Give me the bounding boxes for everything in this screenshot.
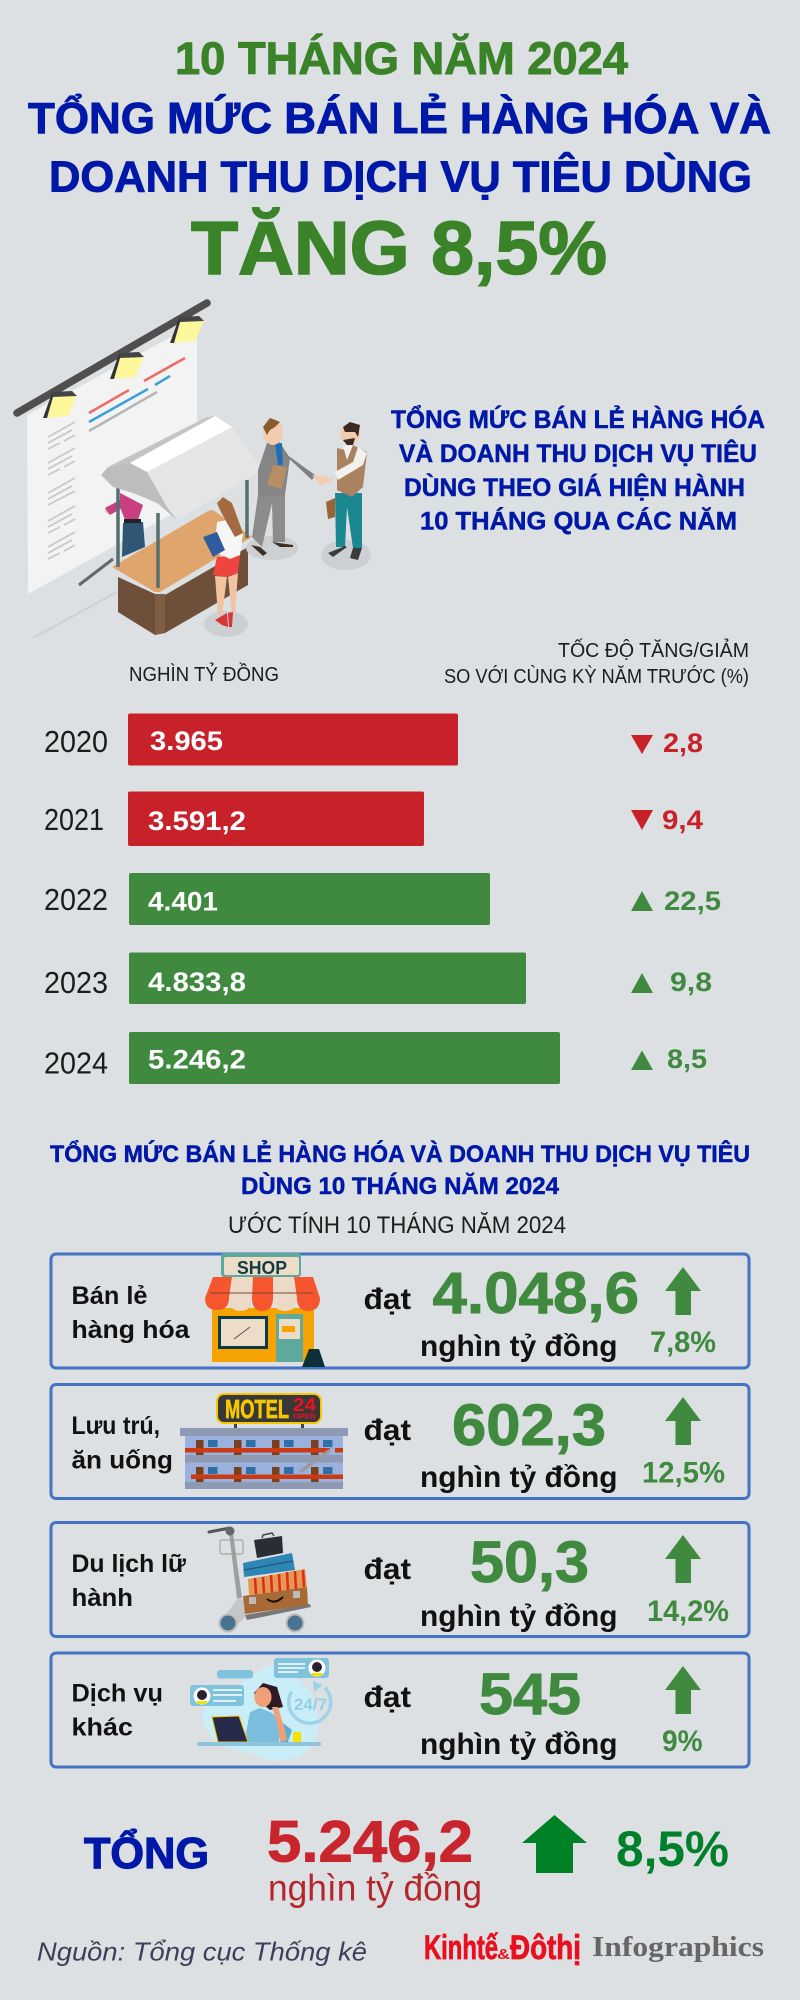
arrow up — [665, 1535, 701, 1583]
panel: other services — [51, 1653, 749, 1767]
icon: shop — [205, 1253, 325, 1367]
bar 2021: 2021 — [44, 802, 104, 837]
section subheading: ƯỚC TÍNH 10 THÁNG NĂM 2024 — [228, 1212, 566, 1239]
text: dat: đạt — [364, 1283, 411, 1316]
icon: motel: 24 — [293, 1395, 316, 1415]
icon: motel: OPEN — [293, 1412, 316, 1420]
bar 2024: 2024 — [44, 1046, 108, 1080]
bar 2021: 3.591,2 — [148, 806, 246, 836]
title: TỔNG MỨC BÁN LẺ HÀNG HÓA VÀ — [28, 92, 771, 143]
label: retail: hàng hóa — [72, 1316, 191, 1344]
label: accommodation — [72, 1412, 173, 1474]
axis label: growth rate — [444, 638, 749, 688]
growth: 14,2% — [647, 1595, 729, 1628]
icon: luggage trolley — [209, 1526, 311, 1632]
title: DOANH THU DỊCH VỤ TIÊU DÙNG — [49, 152, 752, 202]
subheading: chart title: DÙNG THEO GIÁ HIỆN HÀNH — [404, 472, 745, 502]
label: travel: Du lịch lữ — [72, 1550, 187, 1578]
bar 2022 — [44, 873, 721, 925]
value: 4.048,6 — [432, 1261, 639, 1326]
total label: TỔNG — [84, 1827, 209, 1878]
bar 2020: 2020 — [44, 724, 108, 759]
label: other services: Dịch vụ — [72, 1680, 163, 1708]
axis label: growth rate: SO VỚI CÙNG KỲ NĂM TRƯỚC (%) — [444, 665, 749, 688]
unit: nghìn tỷ đồng — [420, 1461, 618, 1494]
total value — [267, 1810, 482, 1908]
total value: nghìn tỷ đồng — [268, 1868, 482, 1908]
bar 2023: 4.833,8 — [148, 967, 246, 997]
total growth: 8,5% — [616, 1821, 729, 1877]
label: retail — [72, 1282, 191, 1344]
bar 2021 — [44, 792, 703, 846]
label: accommodation: Lưu trú, — [72, 1412, 160, 1440]
arrow up — [665, 1267, 701, 1315]
icon: customer support — [190, 1658, 336, 1760]
growth: 7,8% — [650, 1326, 716, 1359]
unit: nghìn tỷ đồng — [420, 1330, 618, 1363]
section heading — [50, 1139, 750, 1200]
axis label: unit: NGHÌN TỶ ĐỒNG — [129, 662, 279, 686]
bar 2024 — [44, 1032, 707, 1084]
bar 2023: 9,8 — [670, 967, 712, 997]
bar 2024: 5.246,2 — [148, 1044, 246, 1074]
bar 2022: 4.401 — [148, 886, 218, 916]
source: Nguồn: Tổng cục Thống kê — [37, 1936, 367, 1966]
icon: customer support: 24/7 — [294, 1695, 327, 1714]
bar 2020: 3.965 — [150, 726, 223, 756]
label: travel: hành — [72, 1584, 133, 1612]
section heading: TỔNG MỨC BÁN LẺ HÀNG HÓA VÀ DOANH THU DỊCH VỤ TIÊU — [50, 1139, 750, 1168]
icon: shop: SHOP — [237, 1258, 287, 1278]
logo: Đôthị — [510, 1929, 581, 1967]
subheading: chart title: VÀ DOANH THU DỊCH VỤ TIÊU — [399, 438, 757, 468]
bar 2022: 22,5 — [664, 886, 721, 916]
bar chart: value by year — [44, 714, 721, 1084]
icon: motel: MOTEL — [225, 1394, 289, 1424]
total arrow — [522, 1815, 587, 1873]
label: accommodation: ăn uống — [72, 1446, 173, 1474]
total value: 5.246,2 — [267, 1810, 473, 1874]
value: 545 — [479, 1662, 581, 1727]
section heading: DÙNG 10 THÁNG NĂM 2024 — [241, 1172, 560, 1200]
bar 2022: 2022 — [44, 882, 108, 917]
bar 2021: 9,4 — [662, 805, 703, 835]
illustration: trade fair stall with people — [17, 303, 371, 638]
axis label: growth rate: TỐC ĐỘ TĂNG/GIẢM — [558, 638, 749, 662]
growth: 12,5% — [642, 1456, 725, 1490]
title — [28, 33, 771, 290]
bar 2023 — [44, 952, 712, 1004]
text: dat: đạt — [364, 1681, 411, 1714]
text: dat: đạt — [364, 1553, 411, 1586]
value: 50,3 — [470, 1530, 589, 1595]
icon: motel — [180, 1394, 348, 1489]
arrow up — [665, 1666, 701, 1714]
label: retail: Bán lẻ — [72, 1282, 148, 1310]
value: 602,3 — [452, 1393, 606, 1458]
subheading: chart title: 10 THÁNG QUA CÁC NĂM — [420, 506, 737, 536]
logo: & — [497, 1946, 510, 1963]
title: 10 THÁNG NĂM 2024 — [175, 33, 628, 84]
bar 2020 — [44, 714, 703, 766]
panel: accommodation and food — [51, 1384, 749, 1498]
label: travel — [72, 1550, 187, 1612]
subheading: chart title — [391, 404, 765, 536]
logo: Infographics — [592, 1931, 764, 1963]
text: dat: đạt — [364, 1414, 411, 1447]
bar 2020: 2,8 — [663, 728, 703, 758]
label: other services: khác — [72, 1714, 133, 1742]
label: other services — [72, 1680, 163, 1742]
panel: travel — [51, 1522, 749, 1636]
panel: retail — [51, 1253, 749, 1368]
logo — [424, 1929, 764, 1967]
logo: Kinhtế — [424, 1929, 498, 1967]
subheading: chart title: TỔNG MỨC BÁN LẺ HÀNG HÓA — [391, 404, 765, 434]
title: TĂNG 8,5% — [191, 206, 607, 290]
unit: nghìn tỷ đồng — [420, 1600, 618, 1633]
arrow up — [665, 1397, 701, 1445]
unit: nghìn tỷ đồng — [420, 1728, 618, 1761]
bar 2024: 8,5 — [667, 1044, 707, 1074]
growth: 9% — [662, 1725, 702, 1758]
bar 2023: 2023 — [44, 965, 108, 1000]
